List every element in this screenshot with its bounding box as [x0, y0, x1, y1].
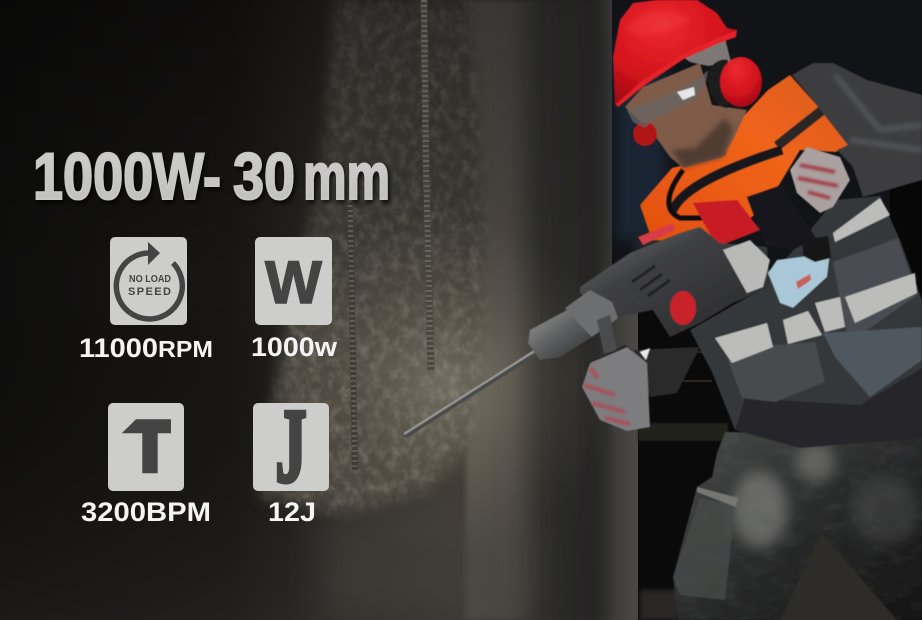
worker — [613, 0, 922, 620]
rebar rods — [350, 0, 431, 470]
safety glasses — [627, 70, 708, 128]
chuck neck — [565, 290, 618, 337]
bottle cap — [803, 236, 831, 262]
rotary hammer drill — [404, 150, 831, 436]
front handle — [597, 315, 617, 354]
handle collar — [587, 345, 632, 372]
orange vest — [640, 75, 848, 245]
hose — [669, 170, 735, 218]
hem — [735, 368, 922, 448]
side pocket — [728, 342, 825, 402]
spec: no load speed — [79, 237, 213, 363]
red selector knob — [670, 291, 696, 325]
beard — [672, 118, 733, 168]
icon: no load speed: NO LOAD — [129, 274, 171, 285]
icon: no load speed: SPEED — [128, 286, 171, 298]
body ribs — [632, 266, 670, 296]
vest strap — [777, 108, 825, 146]
face — [625, 63, 747, 168]
chuck — [528, 310, 592, 360]
jacket torso — [690, 196, 922, 448]
reflective stripes — [715, 198, 917, 363]
drill bit — [404, 352, 536, 436]
rear handle — [672, 150, 782, 212]
rear ear cup — [633, 122, 657, 146]
front glove — [582, 347, 700, 431]
title: mm — [303, 139, 390, 213]
icon: J: J — [275, 387, 307, 504]
title: 30 — [233, 139, 295, 213]
red speck — [592, 359, 606, 366]
light on concrete — [275, 215, 615, 555]
ear muff — [708, 57, 762, 108]
title: 1000W- — [33, 139, 221, 213]
hard hat — [613, 0, 737, 107]
sleeve fold — [835, 75, 922, 150]
broken concrete texture — [257, 0, 486, 519]
dark scene behind worker — [612, 0, 922, 620]
chest pocket — [833, 238, 917, 340]
blue oil bottle — [768, 253, 830, 308]
sleeve — [792, 63, 922, 197]
title — [33, 139, 390, 213]
bottle label — [796, 274, 811, 289]
hair — [683, 38, 731, 66]
cargo trousers — [673, 432, 922, 620]
label: 3200BPM: 3200BPM — [81, 497, 211, 527]
silver motor ring — [723, 240, 770, 293]
red housing — [693, 200, 760, 247]
icon: hammer — [108, 403, 184, 491]
rear glove — [790, 147, 850, 213]
spec: power — [251, 237, 338, 362]
pocket flap — [823, 327, 922, 397]
spec: impact energy — [253, 387, 329, 527]
red top button — [638, 223, 675, 245]
label: 12J: 12J — [268, 497, 316, 527]
spec: impact rate — [81, 403, 211, 527]
label: 11000RPM: 11000RPM — [79, 333, 213, 363]
rear mechanism — [747, 185, 817, 250]
icon: no load speed — [110, 237, 187, 325]
motor body — [580, 227, 770, 337]
label: 1000w: 1000w — [251, 332, 338, 362]
icon: W: W — [265, 249, 322, 316]
